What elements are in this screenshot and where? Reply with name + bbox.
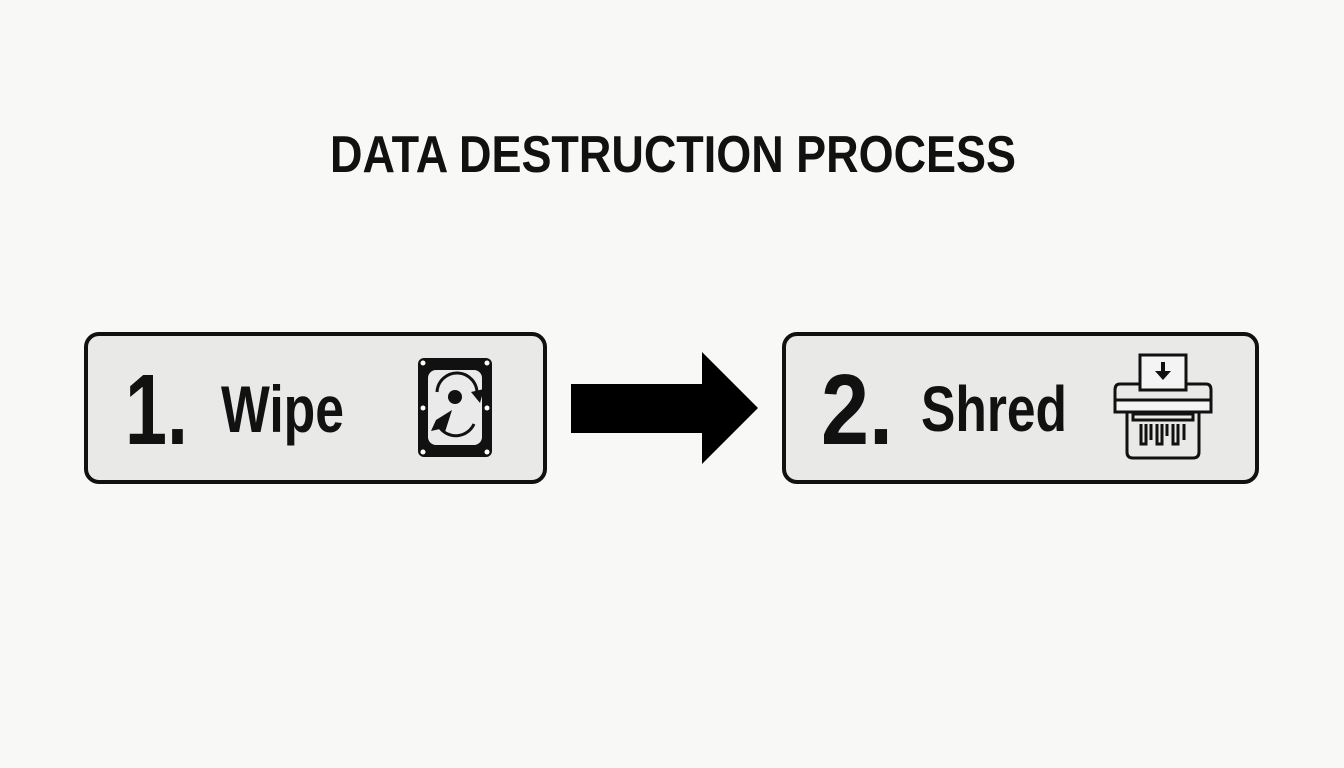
icon: hard drive wipe [418,358,492,457]
icon: paper shredder [1115,355,1211,458]
panel: step 2 shred [784,334,1257,482]
arrow [571,352,758,464]
step number 2: 2. [821,354,893,466]
step label shred: Shred [921,373,1067,445]
step number 1: 1. [125,354,188,466]
panel: step 1 wipe [86,334,545,482]
step label wipe: Wipe [221,372,344,446]
title: DATA DESTRUCTION PROCESS [330,126,1016,184]
